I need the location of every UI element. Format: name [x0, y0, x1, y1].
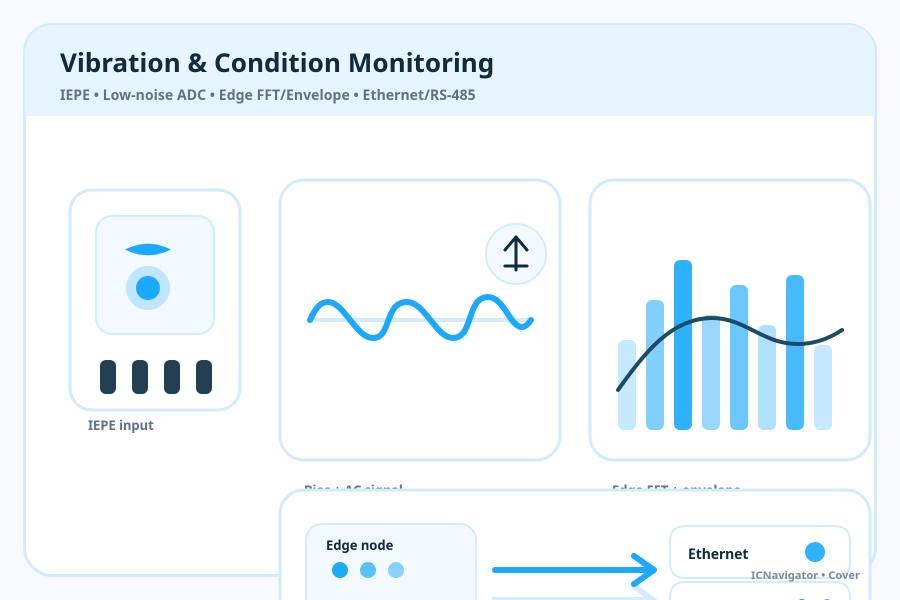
panel: IEPE input — [70, 190, 240, 410]
baseline — [310, 318, 530, 322]
Ethernet box: Ethernet — [688, 545, 748, 564]
panel: edge node and outputs — [280, 490, 870, 600]
title: Vibration & Condition Monitoring — [60, 44, 494, 80]
label: bias and AC signal: Bias + AC signal — [304, 481, 403, 499]
RS-485 box — [670, 582, 850, 600]
subtitle: IEPE • Low-noise ADC • Edge FFT/Envelope • Ethernet/RS-485 — [60, 86, 476, 105]
panel: bias and AC signal — [280, 180, 560, 460]
icon: sensor — [96, 216, 214, 334]
status dots — [332, 562, 404, 578]
Ethernet box — [670, 526, 850, 578]
panel: header band — [25, 25, 875, 116]
label: edge FFT and envelope: Edge FFT + envelope — [612, 481, 742, 499]
connector pins — [100, 360, 212, 394]
edge node box — [306, 524, 476, 600]
label: IEPE input: IEPE input — [88, 416, 154, 434]
arrow: to Ethernet — [495, 556, 654, 584]
icon: bias arrow — [486, 224, 546, 284]
envelope curve — [618, 318, 842, 390]
arrow: to RS-485 — [492, 583, 658, 600]
bar chart — [618, 260, 832, 430]
footer credit: ICNavigator • Cover — [751, 568, 860, 583]
panel: edge FFT and envelope — [590, 180, 870, 460]
AC waveform — [310, 297, 531, 338]
edge node label: Edge node — [326, 536, 394, 554]
